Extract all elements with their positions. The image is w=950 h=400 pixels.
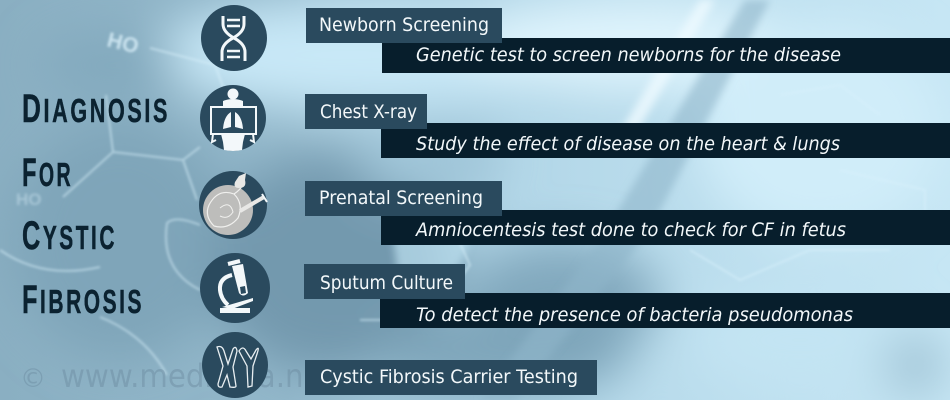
title: Diagnosis for Cystic Fibrosis: FIBROSIS (22, 278, 144, 322)
step 4: Sputum Culture: Sputum Culture (320, 272, 453, 294)
icon: prenatal ultrasound and syringe (199, 171, 267, 239)
step 1: Newborn Screening (306, 8, 950, 73)
icon: X and Y chromosomes (202, 332, 268, 398)
title: Diagnosis for Cystic Fibrosis (22, 87, 170, 322)
step 1: Newborn Screening: Newborn Screening (319, 14, 489, 36)
step 3: Prenatal Screening: Amniocentesis test done to check for CF in fetus (414, 219, 846, 241)
watermark: www.medindia.net (61, 357, 333, 395)
title: Diagnosis for Cystic Fibrosis: DIAGNOSIS (22, 87, 170, 131)
icon: DNA helix (201, 5, 267, 71)
step 4: Sputum Culture (304, 264, 950, 328)
step 3: Prenatal Screening (305, 181, 950, 245)
step 2: Chest X-ray (305, 94, 950, 158)
watermark: © (20, 364, 46, 394)
step 2: Chest X-ray: Study the effect of disease on the heart & lungs (416, 133, 840, 155)
title: Diagnosis for Cystic Fibrosis: FOR (22, 151, 73, 195)
icon: chest X-ray (200, 85, 266, 151)
background: blurred laboratory photo: HO (16, 190, 42, 209)
step 2: Chest X-ray: Chest X-ray (320, 101, 417, 123)
title: Diagnosis for Cystic Fibrosis: CYSTIC (22, 214, 117, 258)
step 3: Prenatal Screening: Prenatal Screening (319, 187, 483, 209)
background: blurred laboratory photo: HO (105, 29, 141, 58)
step 5: Cystic Fibrosis Carrier Testing (305, 360, 597, 395)
step 4: Sputum Culture: To detect the presence of bacteria pseudomonas (416, 304, 853, 326)
step 1: Newborn Screening: Genetic test to screen newborns for the disease (416, 44, 841, 66)
step 5: Cystic Fibrosis Carrier Testing: Cystic Fibrosis Carrier Testing (320, 366, 578, 388)
icon: microscope (200, 253, 270, 323)
